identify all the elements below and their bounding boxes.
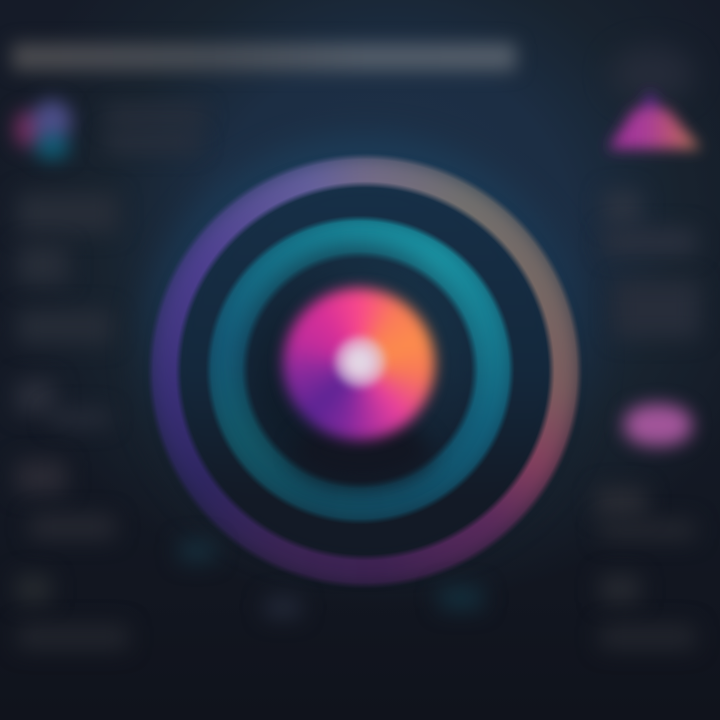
- inner gap shading: [250, 248, 466, 480]
- core highlight: [334, 336, 386, 388]
- chart: concentric rings: [141, 135, 582, 587]
- gap fill: [166, 174, 564, 568]
- bottom labels: [178, 537, 486, 621]
- subtitle text block: [110, 109, 194, 149]
- icon: top-right circle outline: [610, 46, 694, 102]
- icon: top-left legend circle: [4, 90, 82, 168]
- outer ring: [147, 153, 583, 589]
- right text column upper: [606, 192, 698, 338]
- core disc: [283, 288, 435, 440]
- ring halo: [140, 136, 590, 576]
- icon: right pink pill: [624, 404, 692, 446]
- icon: top-right pink pyramid: [602, 88, 706, 160]
- right text column lower: [596, 485, 690, 650]
- dark crescent below core: [295, 421, 430, 481]
- inner teal ring: [202, 212, 518, 528]
- left text column: [14, 192, 122, 650]
- title: [12, 43, 516, 71]
